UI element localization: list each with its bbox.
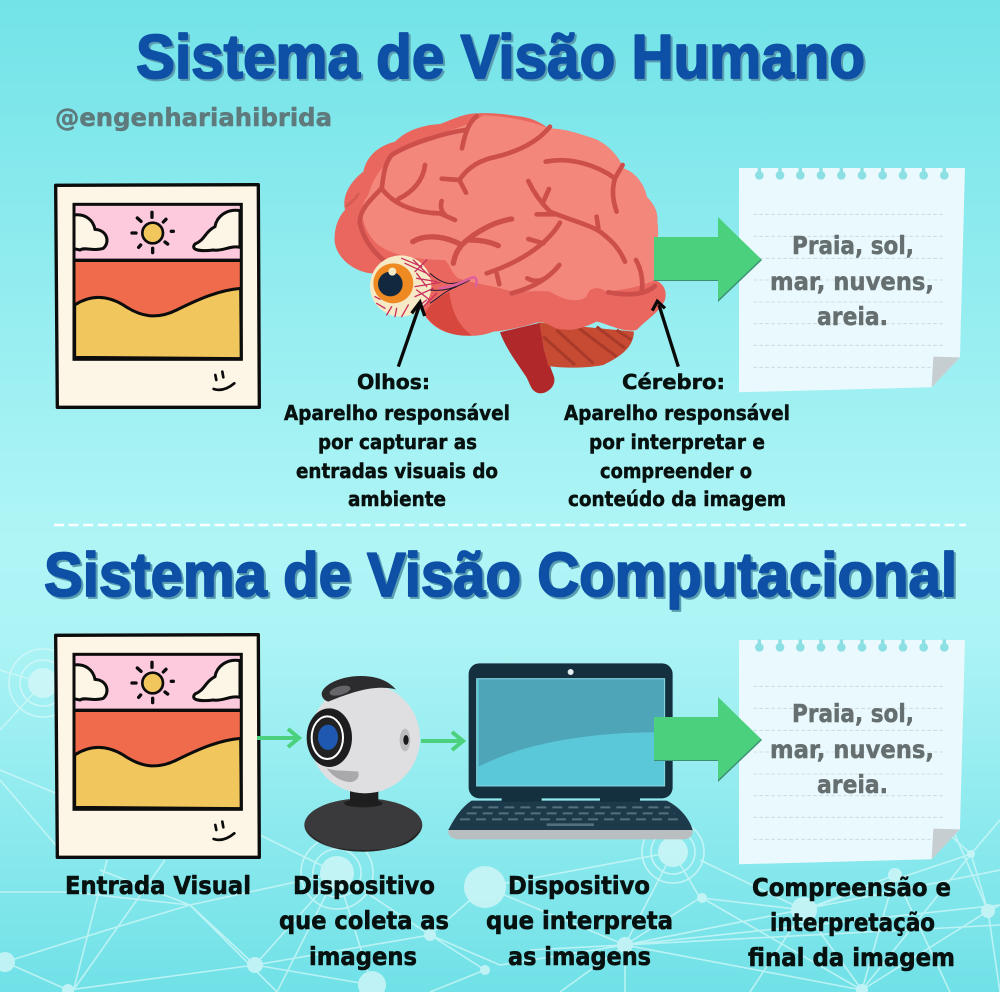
note text: computer: areia. <box>817 770 888 799</box>
text: eyes: ambiente <box>348 487 446 511</box>
note text: human: mar, nuvens, <box>770 267 934 296</box>
icon: picture top <box>56 185 259 407</box>
caption: capture device: imagens <box>309 942 417 971</box>
icon: brain with eye <box>335 113 678 393</box>
note text: computer <box>770 699 934 799</box>
sulci <box>347 116 655 294</box>
caption: capture device: Dispositivo <box>293 871 435 900</box>
caption: final understanding: interpretação <box>770 908 935 937</box>
caption: interpreting device: Dispositivo <box>508 871 650 900</box>
caption: final understanding <box>748 873 955 972</box>
caption: final understanding: final da imagem <box>748 943 955 972</box>
handle: @engenhariahibrida <box>55 103 332 132</box>
text: eyes <box>284 370 510 511</box>
arrow: eye pointer <box>398 302 425 367</box>
cerebellum <box>539 323 634 368</box>
caption: final understanding: Compreensão e <box>752 873 951 902</box>
title: computer vision: Sistema de Visão Computacional <box>46 543 959 612</box>
text: eyes: Aparelho responsável <box>284 401 510 425</box>
text: brain: Cérebro: <box>622 370 725 394</box>
brain outer <box>335 113 666 336</box>
arrow: computer green <box>654 697 762 782</box>
crescent dark <box>424 292 472 336</box>
dashed divider <box>54 524 966 526</box>
title: computer vision: Sistema de Visão Computacional <box>44 541 957 610</box>
brain stem <box>500 323 554 393</box>
note text: human <box>770 231 934 331</box>
cerebrum lighter <box>362 115 658 300</box>
caption: capture device <box>279 871 449 971</box>
caption: interpreting device: que interpreta <box>486 906 673 935</box>
text: eyes: entradas visuais do <box>296 459 498 483</box>
note text: human: Praia, sol, <box>792 231 914 260</box>
network pattern background <box>0 640 1000 992</box>
text: brain: conteúdo da imagem <box>568 487 786 511</box>
note text: computer: mar, nuvens, <box>770 735 934 764</box>
text: brain <box>564 370 790 511</box>
caption: capture device: que coleta as <box>279 906 449 935</box>
text: eyes: Olhos: <box>357 370 430 394</box>
text: brain: por interpretar e <box>589 430 765 454</box>
arrow: brain pointer <box>652 301 678 367</box>
arrow: human green <box>654 217 762 302</box>
icon: picture bottom <box>56 635 259 857</box>
caption: visual input: Entrada Visual <box>65 871 251 900</box>
text: eyes: por capturar as <box>318 430 477 454</box>
caption: interpreting device <box>486 871 673 971</box>
note text: computer: Praia, sol, <box>792 699 914 728</box>
arrow: webcam to laptop <box>421 732 463 750</box>
eye <box>370 255 477 317</box>
note: human result <box>739 167 965 392</box>
text: brain: Aparelho responsável <box>564 401 790 425</box>
title: human vision: Sistema de Visão Humano <box>138 25 867 94</box>
icon: laptop <box>448 663 693 839</box>
note: computer result <box>739 639 965 864</box>
icon: webcam <box>304 676 422 852</box>
caption: interpreting device: as imagens <box>508 942 651 971</box>
title: human vision: Sistema de Visão Humano <box>136 23 865 92</box>
note text: human: areia. <box>817 302 888 331</box>
arrow: picture to webcam <box>257 729 299 747</box>
text: brain: compreender o <box>600 459 752 483</box>
